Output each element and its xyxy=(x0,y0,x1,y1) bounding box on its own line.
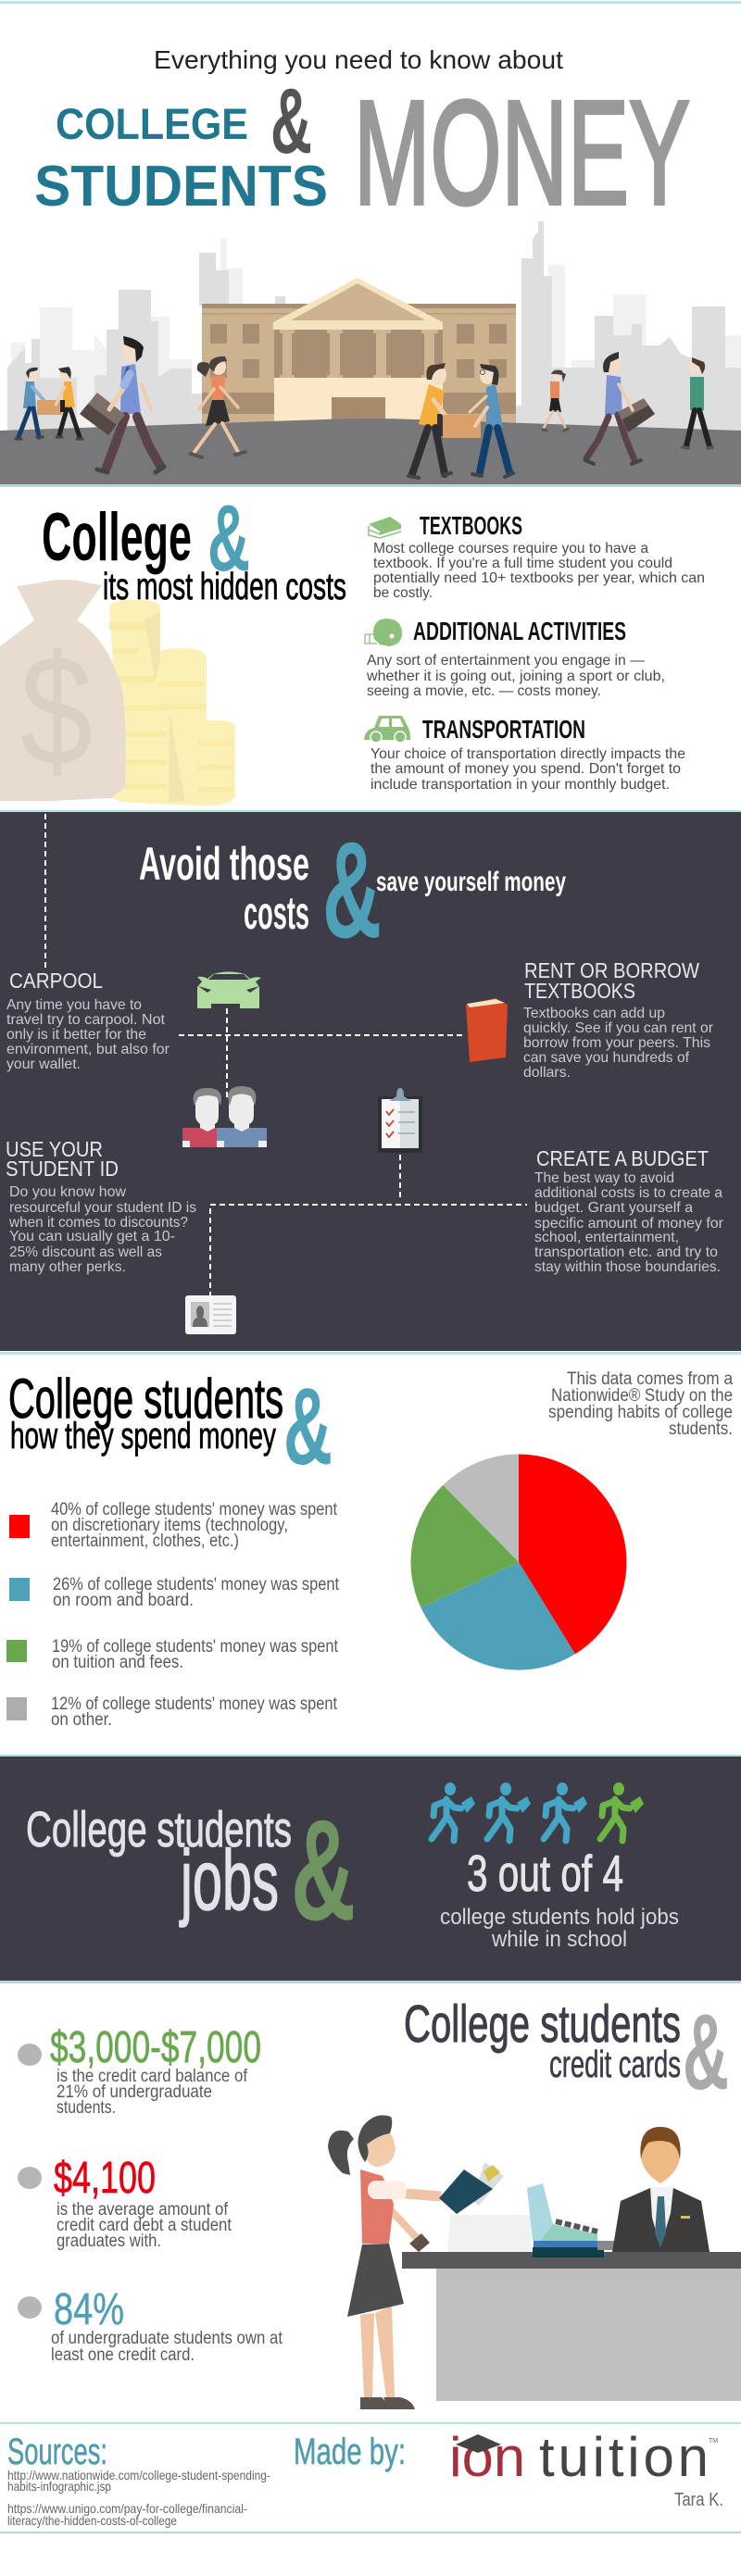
text: author: Tara K. xyxy=(674,2490,723,2510)
person: man yellow vest xyxy=(408,363,452,478)
text: budget body: The best way to avoid xyxy=(534,1170,674,1186)
text: source links: https://www.unigo.com/pay-for-college/financial- xyxy=(7,2501,247,2516)
text: jobs caption xyxy=(440,1905,679,1952)
legend: tuition xyxy=(6,1637,339,1672)
heading: college: College xyxy=(42,500,192,575)
stat: balance: students. xyxy=(57,2098,116,2118)
person: small man blue xyxy=(16,368,44,439)
logo: iontuition xyxy=(449,2426,718,2488)
stat: 3 out of 4: 3 out of 4 xyxy=(467,1844,623,1902)
stat: card ownership: 84% xyxy=(54,2285,124,2334)
text: data note: students. xyxy=(669,1419,733,1439)
worker 2 xyxy=(487,1782,531,1841)
text: activities body xyxy=(366,653,665,699)
text: budget body: additional costs is to create a xyxy=(534,1185,722,1201)
heading: credit cards: credit cards xyxy=(549,2043,681,2085)
icon: clipboard xyxy=(378,1088,422,1153)
person: big man with briefcase xyxy=(80,336,164,472)
text: jobs caption: while in school xyxy=(491,1927,627,1952)
legend: other xyxy=(6,1694,338,1730)
person: man with glasses xyxy=(470,364,513,477)
cashier xyxy=(612,2127,710,2252)
text: source links: habits-infographic.jsp xyxy=(7,2479,111,2494)
illustration: money bag xyxy=(0,580,126,801)
heading: save yourself money: save yourself money xyxy=(376,867,566,897)
text: budget body: stay within those boundaries. xyxy=(534,1259,721,1275)
text: rent body xyxy=(523,1006,714,1081)
subheading: rent or borrow textbooks: RENT OR BORROW xyxy=(524,958,699,982)
box carried by pair xyxy=(443,415,481,438)
legend: other: 12% of college students' money was spent xyxy=(51,1694,338,1714)
worker 1 xyxy=(432,1782,475,1841)
title: students: STUDENTS xyxy=(34,155,328,219)
text: carpool body: only is it better for the xyxy=(6,1027,146,1043)
text: student id body: Do you know how xyxy=(9,1184,126,1200)
stat: card ownership: of undergraduate students own at xyxy=(51,2329,283,2348)
text: textbooks body: be costly. xyxy=(373,585,433,601)
text: carpool body: Any time you have to xyxy=(6,997,142,1013)
text: student id body: many other perks. xyxy=(9,1259,126,1275)
heading: costs: costs xyxy=(244,887,309,939)
text: student id body: You can usually get a 10- xyxy=(9,1229,175,1244)
worker 4 xyxy=(600,1782,644,1841)
text: textbooks body: Most college courses require you to have a xyxy=(373,541,648,556)
stat: card ownership xyxy=(18,2285,283,2365)
stat: balance xyxy=(18,2023,261,2118)
icon: helmet xyxy=(365,619,402,646)
text: source links xyxy=(7,2468,270,2528)
legend: other: on other. xyxy=(51,1710,112,1730)
subheading: textbooks: TEXTBOOKS xyxy=(420,511,522,540)
logo: iontuition: ion xyxy=(449,2426,525,2488)
heading: avoid those: Avoid those xyxy=(139,838,309,890)
illustration: coin stacks xyxy=(109,600,235,806)
subheading: use your student id xyxy=(6,1137,119,1181)
box carried xyxy=(37,400,62,415)
icon: textbooks xyxy=(369,517,401,538)
subheading: use your student id: STUDENT ID xyxy=(6,1157,119,1181)
heading: ampersand: & xyxy=(322,814,382,967)
legend: tuition: on tuition and fees. xyxy=(52,1653,183,1672)
legend: discretionary: 40% of college students' money was spent xyxy=(51,1500,338,1519)
text: textbooks body: potentially need 10+ textbooks per year, which can xyxy=(373,570,705,586)
legend: discretionary xyxy=(9,1500,338,1551)
icon: red book xyxy=(466,998,508,1062)
stat: balance: is the credit card balance of xyxy=(57,2067,248,2086)
subtitle: Everything you need to know about xyxy=(154,45,563,74)
subheading: rent or borrow textbooks: TEXTBOOKS xyxy=(524,979,635,1003)
text: activities body: Any sort of entertainment you engage in — xyxy=(367,653,645,669)
worker 3 xyxy=(544,1782,587,1841)
icon: walking workers xyxy=(432,1782,644,1841)
icon: students xyxy=(182,1086,267,1147)
icon: car xyxy=(364,716,410,743)
text: student id body: when it comes to discounts? xyxy=(8,1215,188,1231)
title: college: COLLEGE xyxy=(56,99,248,148)
heading: made by: Made by: xyxy=(294,2432,406,2472)
heading: college students: College students xyxy=(26,1802,292,1857)
illustration: checkout scene xyxy=(328,2115,741,2409)
text: student id body: resourceful your student ID is xyxy=(9,1200,196,1216)
text: student id body: 25% discount as well as xyxy=(9,1244,162,1260)
text: carpool body: travel try to carpool. Not xyxy=(6,1012,166,1028)
illustration: money bag: $ xyxy=(20,623,93,799)
text: activities body: seeing a movie, etc. — costs money. xyxy=(367,683,601,699)
panel: hidden costs xyxy=(0,485,705,806)
title: ampersand: & xyxy=(270,69,312,173)
legend: tuition: 19% of college students' money was spent xyxy=(52,1637,339,1657)
text: carpool body: your wallet. xyxy=(6,1057,81,1072)
panel: how they spend money xyxy=(6,1366,733,1730)
customer xyxy=(328,2115,441,2409)
text: transportation body: the amount of money you spend. Don't forget to xyxy=(370,761,681,777)
subheading: transportation: TRANSPORTATION xyxy=(422,715,585,744)
text: budget body: specific amount of money for xyxy=(534,1216,724,1232)
text: textbooks body xyxy=(373,541,705,601)
heading: its most hidden costs: its most hidden costs xyxy=(103,565,346,607)
text: budget body xyxy=(534,1170,724,1275)
stat: balance: $3,000-$7,000 xyxy=(50,2023,261,2072)
text: budget body: transportation etc. and try to xyxy=(534,1244,718,1260)
heading: sources: Sources: xyxy=(7,2432,107,2472)
stat: balance: 21% of undergraduate xyxy=(57,2082,212,2102)
text: rent body: dollars. xyxy=(523,1065,571,1081)
text: source links: http://www.nationwide.com/college-student-spending- xyxy=(7,2468,270,2482)
counter xyxy=(402,2215,741,2401)
text: carpool body xyxy=(6,997,170,1072)
cash register xyxy=(527,2183,618,2257)
text: rent body: quickly. See if you can rent or xyxy=(523,1020,714,1036)
text: transportation body: include transportation in your monthly budget. xyxy=(370,777,670,793)
person: woman walking xyxy=(191,356,245,457)
stat: debt: credit card debt a student xyxy=(57,2216,232,2235)
panel: avoid costs xyxy=(0,812,741,1351)
text: transportation body: Your choice of transportation directly impacts the xyxy=(370,746,685,762)
text: budget body: budget. Grant yourself a xyxy=(534,1200,693,1216)
icon: student id card xyxy=(185,1295,236,1334)
stat: debt: is the average amount of xyxy=(57,2200,229,2220)
text: student id body xyxy=(8,1184,196,1275)
panel: credit cards xyxy=(18,1992,741,2409)
text: data note xyxy=(548,1369,733,1439)
text: jobs caption: college students hold jobs xyxy=(440,1905,679,1930)
heading: college students: College students xyxy=(8,1368,283,1430)
panel: footer xyxy=(7,2426,723,2528)
text: carpool body: environment, but also for xyxy=(6,1042,170,1057)
text: rent body: Textbooks can add up xyxy=(523,1006,665,1021)
text: textbooks body: textbook. If you're a full time student you could xyxy=(373,556,672,571)
credit cards xyxy=(439,2162,504,2214)
stat: debt: $4,100 xyxy=(54,2154,156,2203)
heading: ampersand: & xyxy=(283,1366,333,1488)
text: source links: literacy/the-hidden-costs-of-college xyxy=(7,2513,177,2528)
pie chart xyxy=(410,1454,626,1669)
person: man with bag right xyxy=(585,352,655,464)
stat: debt: graduates with. xyxy=(57,2232,161,2251)
text: transportation body xyxy=(370,746,685,793)
stat: debt xyxy=(18,2154,232,2251)
subheading: create a budget: CREATE A BUDGET xyxy=(536,1146,709,1170)
panel: title header xyxy=(34,45,690,235)
legend: discretionary: on discretionary items (technology, xyxy=(51,1516,288,1535)
subheading: use your student id: USE YOUR xyxy=(6,1137,103,1161)
stat: card ownership: least one credit card. xyxy=(51,2345,195,2365)
panel: jobs xyxy=(0,1757,741,1981)
logo: iontuition: tuition xyxy=(539,2426,709,2488)
person: small woman xyxy=(543,370,568,431)
text: rent body: borrow from your peers. This xyxy=(523,1035,710,1051)
legend: discretionary: entertainment, clothes, etc.) xyxy=(51,1532,239,1551)
icon: car front xyxy=(197,972,261,1008)
text: rent body: can save you hundreds of xyxy=(523,1050,690,1066)
subheading: additional activities: ADDITIONAL ACTIVITIES xyxy=(413,617,626,645)
heading: ampersand: & xyxy=(291,1790,356,1950)
skyline xyxy=(7,221,741,435)
illustration: campus scene xyxy=(0,221,741,484)
ground xyxy=(0,419,741,484)
people xyxy=(16,336,712,478)
legend: room and board xyxy=(9,1575,340,1610)
logo: iontuition: TM xyxy=(709,2438,718,2445)
legend: room and board: on room and board. xyxy=(53,1591,194,1610)
text: budget body: school, entertainment, xyxy=(534,1230,679,1245)
person: man green xyxy=(683,357,712,448)
building xyxy=(202,278,516,424)
heading: ampersand: & xyxy=(207,485,250,591)
heading: how they spend money: how they spend money xyxy=(10,1416,276,1457)
subheading: carpool: CARPOOL xyxy=(9,969,103,993)
subheading: rent or borrow textbooks xyxy=(524,958,699,1003)
person: small man yellow xyxy=(56,367,82,439)
text: activities body: whether it is going out, joining a sport or club, xyxy=(366,669,665,684)
heading: jobs: jobs xyxy=(179,1833,279,1928)
legend: room and board: 26% of college students' money was spent xyxy=(53,1575,340,1594)
